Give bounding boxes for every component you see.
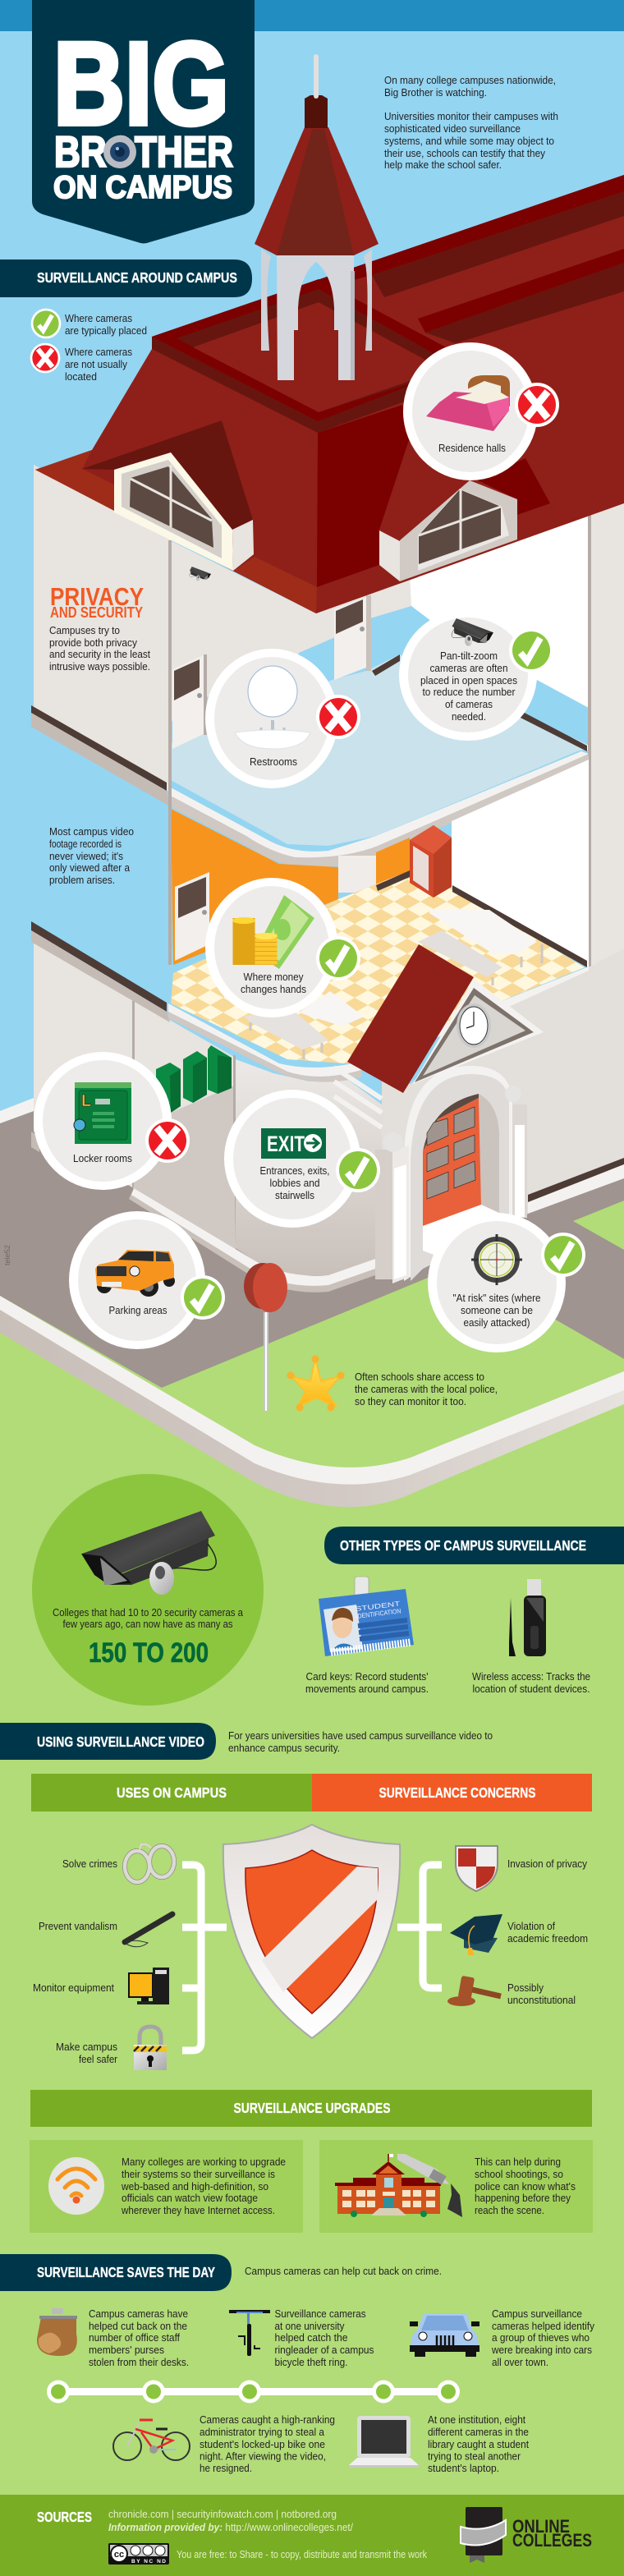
label: Restrooms [250, 755, 297, 768]
text: different cameras in the [428, 2426, 529, 2438]
connector brackets [182, 1865, 442, 2050]
online colleges logo: ONLINE [512, 2516, 570, 2537]
police access note: the cameras with the local police, [355, 1383, 498, 1395]
police access note: so they can monitor it too. [355, 1395, 466, 1407]
ground recessed wall [236, 1059, 382, 1275]
upper room floor [171, 654, 587, 846]
icon: handcuffs [125, 1844, 174, 1882]
label: Parking areas [108, 1304, 167, 1316]
icon: gavel [447, 1976, 501, 2006]
text: This can help during [475, 2156, 561, 2168]
steps [334, 1068, 382, 1127]
text [200, 2413, 335, 2474]
icon: wifi [48, 2157, 104, 2215]
title words [53, 19, 233, 205]
sidewalk strip [0, 1098, 34, 1123]
check badge [316, 936, 360, 980]
signpost pin [244, 1263, 287, 1411]
icon: padlock [134, 2027, 167, 2070]
video intro text: For years universities have used campus surveillance video to [228, 1729, 493, 1742]
intro text: their use, schools can testify that they [384, 147, 545, 159]
bubble: entrances and exits [224, 1090, 380, 1228]
privacy and security note: and security in the least [49, 648, 150, 660]
intro text: systems, and while some may object to [384, 135, 554, 147]
artist credit: tele52 [3, 1245, 11, 1265]
icon: bike front [229, 2312, 270, 2356]
text: all over town. [492, 2356, 548, 2368]
legend [30, 309, 147, 383]
left pillar [375, 1146, 409, 1283]
spire pole [314, 54, 319, 99]
legend labels: Where cameras [65, 312, 132, 324]
text: school shootings, so [475, 2168, 563, 2180]
door panes [427, 1107, 475, 1199]
heading: using surveillance video [0, 1723, 216, 1760]
icon: id card: STUDENT [355, 1600, 401, 1613]
text: ringleader of a campus [274, 2344, 374, 2356]
bubble: at risk sites [428, 1213, 585, 1352]
creative commons badge: BY NC ND [131, 2559, 166, 2565]
icon: mirror [248, 666, 297, 717]
stat text [53, 1606, 244, 1630]
label: Residence halls [438, 442, 506, 454]
icon: computer [129, 1968, 169, 2004]
eave left [234, 557, 317, 613]
label: placed in open spaces [420, 674, 517, 686]
concerns labels: unconstitutional [507, 1994, 576, 2006]
icon: exit sign [261, 1128, 326, 1159]
cross badge [145, 1118, 190, 1163]
door: orange room [175, 872, 209, 961]
header: surveillance upgrades: SURVEILLANCE UPGRADES [233, 2100, 391, 2116]
intro text: help make the school safer. [384, 158, 502, 171]
upper slab [169, 753, 589, 867]
icon: locker: L [81, 1092, 91, 1110]
icon: purse [37, 2308, 77, 2356]
uses labels: Solve crimes [62, 1857, 117, 1870]
video footage note: Most campus video [49, 825, 134, 838]
icon: id card: IDENTIFICATION [356, 1607, 401, 1620]
picnic table: left [244, 991, 364, 1059]
bubble: locker rooms [34, 1052, 190, 1190]
label: someone can be [461, 1304, 533, 1316]
label: changes hands [241, 983, 306, 995]
platform inner shadow [177, 289, 460, 412]
lower slab [168, 967, 589, 1077]
platform top [193, 302, 443, 412]
road [0, 1111, 624, 1388]
lower ridge bands [418, 249, 624, 333]
arch face [411, 1074, 509, 1281]
intro text: On many college campuses nationwide, [384, 74, 556, 86]
story: car thieves [410, 2307, 594, 2368]
text: number of office staff [89, 2331, 180, 2344]
header: surveillance upgrades [30, 2090, 592, 2127]
concerns labels: academic freedom [507, 1932, 588, 1945]
icon: baton [125, 1914, 172, 1947]
sources list: chronicle.com | securityinfowatch.com | notbored.org [108, 2508, 337, 2520]
bubble: where money changes hands [205, 878, 360, 1017]
left foot stub [31, 1132, 39, 1152]
upper ridge dark band [372, 191, 624, 297]
side columns [261, 249, 271, 351]
creative commons badge [108, 2543, 169, 2565]
legend cross [30, 343, 60, 373]
text: library caught a student [428, 2438, 529, 2450]
story: bicycle ring [229, 2307, 374, 2368]
top band [0, 0, 624, 31]
wireless access text: Wireless access: Tracks the [472, 1670, 590, 1683]
icon: laptop [349, 2416, 419, 2468]
icon: bicycle [113, 2420, 190, 2460]
text: Surveillance cameras [274, 2307, 366, 2320]
platform outer [152, 279, 472, 421]
locker 3 [208, 1045, 232, 1094]
text: trying to steal another [428, 2450, 521, 2462]
intro text: Big Brother is watching. [384, 86, 487, 99]
video footage note: footage recorded is [49, 838, 122, 850]
bubble: pan-tilt-zoom cameras [399, 609, 553, 741]
orange room wall [171, 809, 338, 965]
text: At one institution, eight [428, 2413, 525, 2426]
label: stairwells [275, 1189, 314, 1201]
concerns labels: Violation of [507, 1920, 555, 1932]
header: uses on campus [31, 1774, 312, 1811]
picnic table: right [418, 909, 542, 985]
arch outer [404, 1066, 512, 1281]
spire centre [277, 129, 354, 255]
upper ridge bright band [152, 175, 624, 337]
online colleges logo: COLLEGES [512, 2530, 592, 2551]
right base band [528, 1158, 624, 1202]
upper room back wall [170, 540, 411, 723]
title words: BROTHER [54, 128, 233, 177]
check badge [509, 628, 553, 673]
stat number: 150 TO 200 [89, 1637, 209, 1669]
uses labels: Prevent vandalism [39, 1920, 117, 1932]
stat circle [32, 1474, 264, 1706]
intro text: Universities monitor their campuses with [384, 110, 558, 122]
small wall camera [190, 567, 211, 581]
label: Entrances, exits, [259, 1164, 330, 1177]
icon: car front [410, 2313, 479, 2357]
text: helped cut back on the [89, 2320, 187, 2332]
bubble: parking areas [69, 1211, 225, 1349]
gable roof [347, 944, 474, 1093]
under platform dark band [152, 337, 460, 433]
text: night. After viewing the video, [200, 2450, 326, 2462]
text: at one university [274, 2320, 345, 2332]
text [121, 2156, 286, 2216]
right wall column [589, 498, 624, 1171]
label [420, 650, 517, 723]
police access note [355, 1371, 498, 1407]
heading: surveillance around campus [0, 259, 252, 297]
story: purses [37, 2307, 189, 2368]
video intro text: enhance campus security. [228, 1742, 340, 1754]
eave right [316, 565, 398, 613]
icon: id card [319, 1577, 414, 1656]
story: administrator bike [113, 2413, 335, 2474]
heading: surveillance saves the day [0, 2254, 232, 2291]
text: Campus cameras have [89, 2307, 188, 2320]
timeline [47, 2380, 460, 2403]
heading: other types [324, 1527, 624, 1564]
inner lawn [162, 1265, 624, 1470]
bell tower [255, 54, 379, 380]
lower wall right [382, 948, 624, 1265]
text [491, 2307, 594, 2368]
card keys text [305, 1670, 429, 1695]
icon: security camera [81, 1511, 216, 1595]
roof body [35, 175, 624, 613]
intro text [384, 74, 558, 171]
floor divider stripes [31, 705, 167, 791]
concerns labels: Invasion of privacy [507, 1857, 587, 1870]
upper baseboards [372, 654, 587, 751]
locker 1 [156, 1063, 181, 1113]
heading: surveillance around campus: SURVEILLANCE AROUND CAMPUS [37, 269, 237, 286]
concerns labels: Possibly [507, 1981, 544, 1994]
panel: upgrades web based [30, 2140, 303, 2233]
text: wherever they have Internet access. [121, 2204, 275, 2216]
text: their systems so their surveillance is [122, 2168, 275, 2180]
uses labels: feel safer [79, 2053, 118, 2065]
text: happening before they [475, 2192, 571, 2204]
header: uses on campus: USES ON CAMPUS [117, 1784, 227, 1801]
right pillar [512, 1104, 527, 1218]
lawn background [0, 1150, 624, 2576]
title banner [32, 0, 255, 243]
video footage note [49, 825, 134, 886]
label: lobbies and [269, 1177, 320, 1189]
icon: revolver [397, 2154, 462, 2217]
porch floor [423, 1205, 525, 1265]
spire sides [255, 127, 379, 255]
text: student's laptop. [428, 2462, 499, 2474]
slab underside [168, 1012, 361, 1082]
icon: crosshair [471, 1234, 522, 1285]
legend labels: are typically placed [65, 324, 147, 337]
column in orange room [338, 856, 376, 893]
online colleges logo [461, 2507, 592, 2563]
text: police can know what's [475, 2180, 576, 2193]
header: surveillance concerns: SURVEILLANCE CONCERNS [379, 1784, 535, 1801]
text: a group of thieves who [492, 2331, 590, 2344]
icon: sink [235, 720, 310, 749]
intro text: sophisticated video surveillance [384, 122, 521, 135]
recessed wall below lockers [134, 1086, 236, 1250]
bubble: residence halls [403, 342, 559, 480]
roof [35, 175, 624, 613]
text: Many colleges are working to upgrade [122, 2156, 286, 2168]
foot of building [129, 1188, 375, 1293]
heading: surveillance saves the day: SURVEILLANCE SAVES THE DAY [37, 2264, 215, 2280]
label: cameras are often [430, 662, 507, 674]
icon: graduation cap [450, 1914, 502, 1955]
eave far left [35, 450, 114, 511]
video footage note: only viewed after a [49, 861, 131, 874]
text: web-based and high-definition, so [121, 2180, 268, 2193]
icon: bed [426, 375, 510, 431]
icon: suv [95, 1250, 175, 1297]
right dormer [379, 458, 550, 581]
text [274, 2307, 374, 2368]
upper room blue walls [299, 606, 589, 746]
text: members' purses [89, 2344, 164, 2356]
icon: camera lens [103, 135, 136, 168]
text: student's locked-up bike one [200, 2438, 325, 2450]
panel: upgrades school shootings [319, 2140, 593, 2233]
concerns labels [507, 1857, 588, 2006]
red door [423, 1098, 481, 1226]
arch dark recess [423, 1094, 479, 1152]
sources heading: SOURCES [37, 2509, 92, 2525]
label [453, 1292, 540, 1329]
sky background [0, 0, 624, 1166]
text: Campus surveillance [492, 2307, 582, 2320]
text [89, 2307, 189, 2368]
check badge [181, 1275, 225, 1320]
icon: money [232, 895, 314, 969]
text: he resigned. [200, 2462, 252, 2474]
text: were breaking into cars [491, 2344, 592, 2356]
door: upper left [172, 654, 207, 749]
vending machine [410, 825, 452, 898]
heading: using surveillance video: USING SURVEILLANCE VIDEO [37, 1733, 204, 1750]
door: upper right [334, 595, 371, 680]
left tower wall [34, 465, 171, 792]
saves intro text: Campus cameras can help cut back on crime. [245, 2265, 442, 2277]
creative commons badge: cc [114, 2550, 124, 2560]
lower room white wall [452, 760, 589, 967]
legend labels: Where cameras [65, 346, 132, 358]
privacy and security note: PRIVACY [50, 582, 144, 611]
upper right lawn patch [573, 1201, 624, 1250]
legend labels: located [65, 370, 97, 383]
legend labels: are not usually [65, 358, 127, 370]
hip face right [317, 405, 411, 587]
label [259, 1164, 330, 1201]
entrance porch [375, 1066, 527, 1283]
text: administrator trying to steal a [200, 2426, 325, 2438]
icon: small shield [456, 1846, 498, 1891]
information credit: Information provided by: http://www.onlinecolleges.net/ [108, 2521, 353, 2533]
story: stolen laptop [349, 2413, 529, 2474]
cross badge [515, 383, 559, 427]
label: "At risk" sites (where [453, 1292, 540, 1304]
label: Where money [243, 971, 304, 983]
label: Locker rooms [73, 1152, 132, 1164]
icon: clock [457, 1003, 491, 1048]
privacy and security note: provide both privacy [49, 636, 137, 649]
pillar ball right [505, 1086, 521, 1102]
stat text: Colleges that had 10 to 20 security cameras a [53, 1606, 244, 1619]
privacy and security note [49, 582, 150, 673]
label: easily attacked) [463, 1316, 530, 1329]
privacy and security note: intrusive ways possible. [49, 660, 150, 673]
video footage note: never viewed; it's [49, 850, 123, 862]
label: to reduce the number [422, 686, 516, 698]
license text: You are free: to Share - to copy, distribute and transmit the work [177, 2548, 427, 2560]
text: cameras helped identify [492, 2320, 594, 2332]
icon: locker [74, 1082, 131, 1144]
locker 2 [183, 1051, 207, 1103]
wireless access text: location of student devices. [473, 1683, 590, 1695]
video footage note: problem arises. [49, 874, 115, 886]
label: Pan-tilt-zoom [440, 650, 498, 662]
central shield [223, 1825, 400, 2038]
bubble: restrooms [205, 649, 360, 788]
footer [0, 2495, 624, 2576]
green hallway lockers [156, 1045, 232, 1113]
stat text: few years ago, can now have as many as [62, 1618, 233, 1630]
left dormer [82, 420, 254, 571]
icon: camera [452, 618, 493, 646]
icon: exit sign: EXIT [267, 1132, 305, 1156]
uses labels: Make campus [56, 2041, 117, 2053]
campus curb [0, 1296, 624, 1507]
text [428, 2413, 529, 2474]
privacy and security note: Campuses try to [49, 624, 120, 636]
text: stolen from their desks. [89, 2356, 189, 2368]
uses labels [33, 1857, 118, 2065]
legend check [31, 309, 61, 338]
main arch [277, 255, 354, 380]
icon: school [335, 2154, 441, 2217]
privacy and security note: AND SECURITY [50, 604, 143, 621]
text: reach the scene. [475, 2204, 544, 2216]
text: bicycle theft ring. [274, 2356, 348, 2368]
text [475, 2156, 576, 2216]
gable wall [413, 979, 544, 1084]
building [0, 465, 624, 1293]
pillar ball left [383, 1132, 403, 1152]
title words: ON CAMPUS [53, 170, 232, 205]
label [241, 971, 306, 995]
card keys text: Card keys: Record students' [305, 1670, 429, 1683]
cross badge [316, 695, 360, 739]
lower baseboards [376, 870, 587, 967]
spire cap [305, 95, 328, 128]
icon: police badge star [287, 1355, 345, 1411]
front gable [347, 944, 544, 1093]
wireless access text [472, 1670, 590, 1695]
police access note: Often schools share access to [355, 1371, 484, 1383]
label: of cameras [445, 698, 493, 710]
uses labels: Monitor equipment [33, 1981, 114, 1994]
label: needed. [452, 710, 486, 723]
check badge [541, 1233, 585, 1277]
card keys text: movements around campus. [305, 1683, 429, 1695]
text: officials can watch view footage [122, 2192, 258, 2204]
icon: usb wireless adapter [509, 1579, 546, 1656]
check badge [336, 1148, 380, 1192]
header: surveillance concerns [312, 1774, 592, 1811]
ground left wall [34, 942, 234, 1188]
video intro text [228, 1729, 493, 1754]
text: Cameras caught a high-ranking [200, 2413, 335, 2426]
foot highlight [131, 1188, 375, 1286]
lower floor checker [171, 870, 585, 1063]
arch shade [479, 1094, 499, 1214]
text: helped catch the [274, 2331, 348, 2344]
leg shade [351, 271, 355, 380]
title words: BIG [53, 19, 229, 149]
legend labels [65, 312, 147, 383]
upper room white wall [410, 509, 589, 751]
